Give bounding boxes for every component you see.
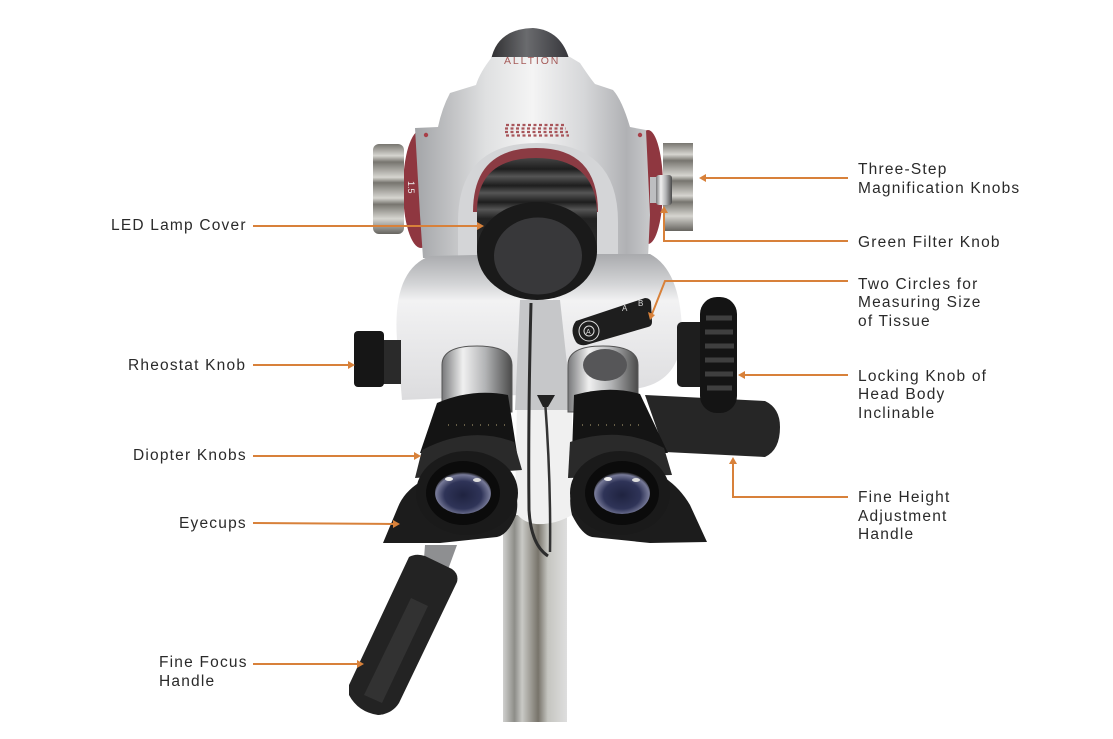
left magnification knob: [373, 130, 439, 248]
callout: LED Lamp Cover: LED Lamp Cover: [111, 217, 247, 234]
callout: Fine Height Adjustment Handle: Fine Height: [858, 489, 950, 506]
callout: Diopter Knobs: Diopter Knobs: [133, 447, 247, 464]
callout: Eyecups: Eyecups: [179, 515, 247, 532]
callout: Locking Knob of Head Body Inclinable: [738, 368, 987, 422]
finned LED lamp: [477, 158, 597, 250]
callout: Locking Knob of Head Body Inclinable: Inclinable: [858, 405, 936, 422]
right eyepiece: [568, 390, 707, 543]
cable: [529, 303, 555, 556]
center body block: [515, 300, 572, 410]
side indicator dots: [424, 133, 428, 137]
brand text: ALLTION: [504, 55, 560, 67]
callout: Fine Height Adjustment Handle: [729, 457, 950, 543]
callout: Two Circles for Measuring Size of Tissue: [648, 276, 982, 330]
callout: Eyecups: [179, 515, 400, 532]
fine focus rod: [423, 545, 457, 575]
red lamp ring: [473, 148, 598, 212]
callout: Green Filter Knob: [660, 206, 1001, 251]
lower right disc housing: [553, 254, 682, 400]
callout: Two Circles for Measuring Size of Tissue: Two Circles for: [858, 276, 978, 293]
callout: Fine Height Adjustment Handle: Adjustment: [858, 508, 948, 525]
callout: Fine Focus Handle: Fine Focus: [159, 654, 248, 671]
green filter knob: [650, 175, 672, 205]
fine focus handle: [349, 555, 457, 715]
callout: Fine Height Adjustment Handle: Handle: [858, 526, 914, 543]
support pole: [503, 515, 567, 722]
rheostat knob: [354, 331, 401, 387]
callout: Two Circles for Measuring Size of Tissue: Measuring Size: [858, 294, 982, 311]
measuring circles label plate: B: [638, 299, 643, 308]
callout: Locking Knob of Head Body Inclinable: Head Body: [858, 386, 946, 403]
fine height adjustment handle: [645, 395, 780, 457]
callout: Three-Step Magnification Knobs: Three-Step: [858, 161, 948, 178]
callout: Green Filter Knob: Green Filter Knob: [858, 234, 1001, 251]
callout: Three-Step Magnification Knobs: Magnification Knobs: [858, 180, 1020, 197]
left magnification knob: 1.5: [406, 181, 416, 194]
measuring circles label plate: A: [622, 304, 628, 313]
right eyepiece tube: [568, 346, 638, 412]
right eyecup: [570, 467, 707, 543]
callout: Two Circles for Measuring Size of Tissue: of Tissue: [858, 313, 931, 330]
callout: Diopter Knobs: [133, 447, 421, 464]
callout: Locking Knob of Head Body Inclinable: Locking Knob of: [858, 368, 987, 385]
callout: LED Lamp Cover: [111, 217, 484, 234]
lower left disc housing: [396, 254, 532, 400]
measuring circles label plate: [572, 298, 652, 345]
LED lamp cover: [477, 202, 597, 300]
white central column: [515, 400, 572, 524]
callout: Rheostat Knob: [128, 357, 355, 374]
microscope illustration: [349, 28, 780, 722]
rear lens cap: [491, 28, 570, 62]
left eyepiece tube: [442, 346, 512, 412]
callout: Fine Focus Handle: [159, 654, 364, 690]
left eyepiece: [383, 393, 522, 543]
lamp collar: [458, 143, 618, 260]
locking knob: [677, 297, 737, 413]
right magnification knob: [633, 130, 693, 244]
red logo mark: [505, 125, 569, 136]
callout: Rheostat Knob: Rheostat Knob: [128, 357, 246, 374]
callout: Fine Focus Handle: Handle: [159, 673, 215, 690]
measuring circles label plate: A: [586, 329, 591, 336]
left eyecup: [383, 468, 517, 543]
head body shell: [415, 57, 650, 258]
callout: Three-Step Magnification Knobs: [699, 161, 1020, 197]
